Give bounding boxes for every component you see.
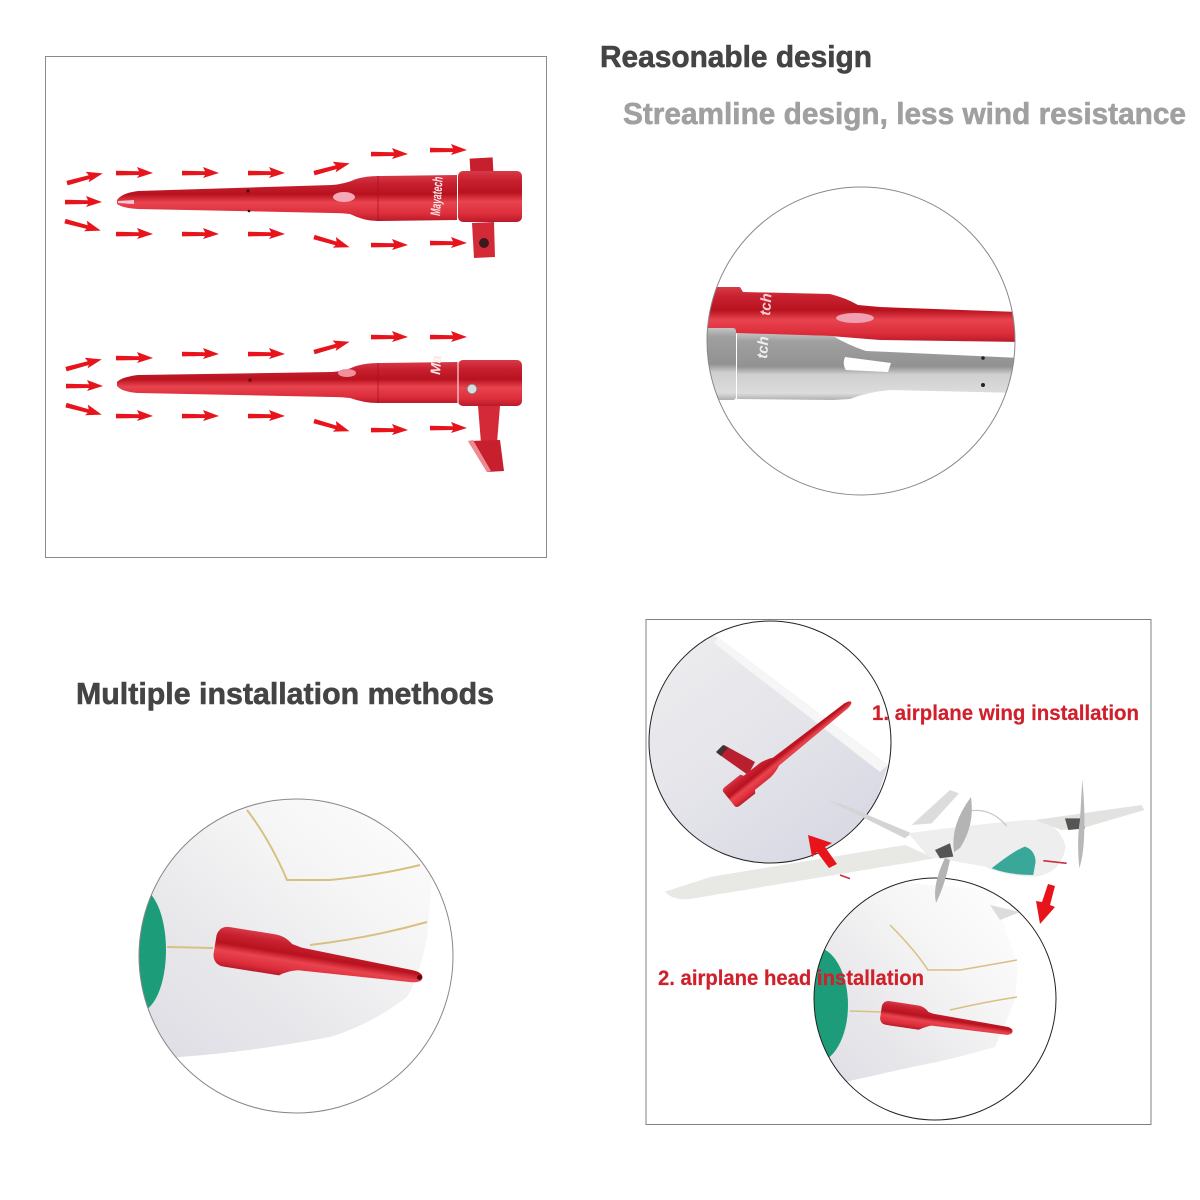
arrow: to nose magnifier	[1036, 884, 1055, 924]
green canopy	[140, 895, 166, 1008]
arrows: airflow around top probe	[64, 144, 467, 252]
silver probe detail	[704, 328, 1020, 400]
wing surface	[650, 636, 888, 862]
label: head installation: 2. airplane head installation	[658, 967, 924, 990]
seam lines	[850, 925, 1017, 1012]
probe: lower red pitot tube with foot bracket	[117, 354, 522, 472]
airplane model	[665, 779, 1144, 899]
probe: top red pitot tube with split bracket	[117, 157, 522, 258]
panel: installation positions on airplane	[640, 620, 1151, 1124]
heading: Reasonable design: Reasonable design	[600, 39, 872, 74]
heading: Multiple installation methods: Multiple installation methods	[76, 676, 494, 711]
magnifier: wing installation	[640, 620, 891, 880]
foam nose	[825, 885, 1012, 1082]
red probe detail	[700, 287, 1020, 342]
probe on wing	[716, 692, 859, 808]
brand label red: tch	[757, 293, 776, 316]
arrow: to wing magnifier	[808, 835, 837, 868]
brand label: Mayatech	[427, 176, 446, 216]
label: wing installation: 1. airplane wing installation	[872, 702, 1139, 725]
foam nose	[148, 802, 428, 1058]
brand label partial: Ma	[427, 354, 444, 375]
magnifier: probe installed on aircraft nose	[138, 798, 454, 1114]
probe installed on nose	[212, 925, 426, 998]
seam lines	[167, 810, 427, 948]
green canopy	[814, 950, 848, 1057]
subheading: Streamline design, less wind resistance: Streamline design, less wind resistance	[623, 96, 1186, 131]
panel: airflow over probes	[46, 56, 546, 558]
magnifier: nose installation	[814, 878, 1056, 1120]
propeller	[935, 797, 972, 903]
arrows: airflow around lower probe	[64, 331, 467, 436]
brand label silver: tch	[754, 336, 773, 359]
probe on nose	[879, 1000, 1014, 1044]
magnifier: red and silver probes compared	[700, 187, 1020, 495]
